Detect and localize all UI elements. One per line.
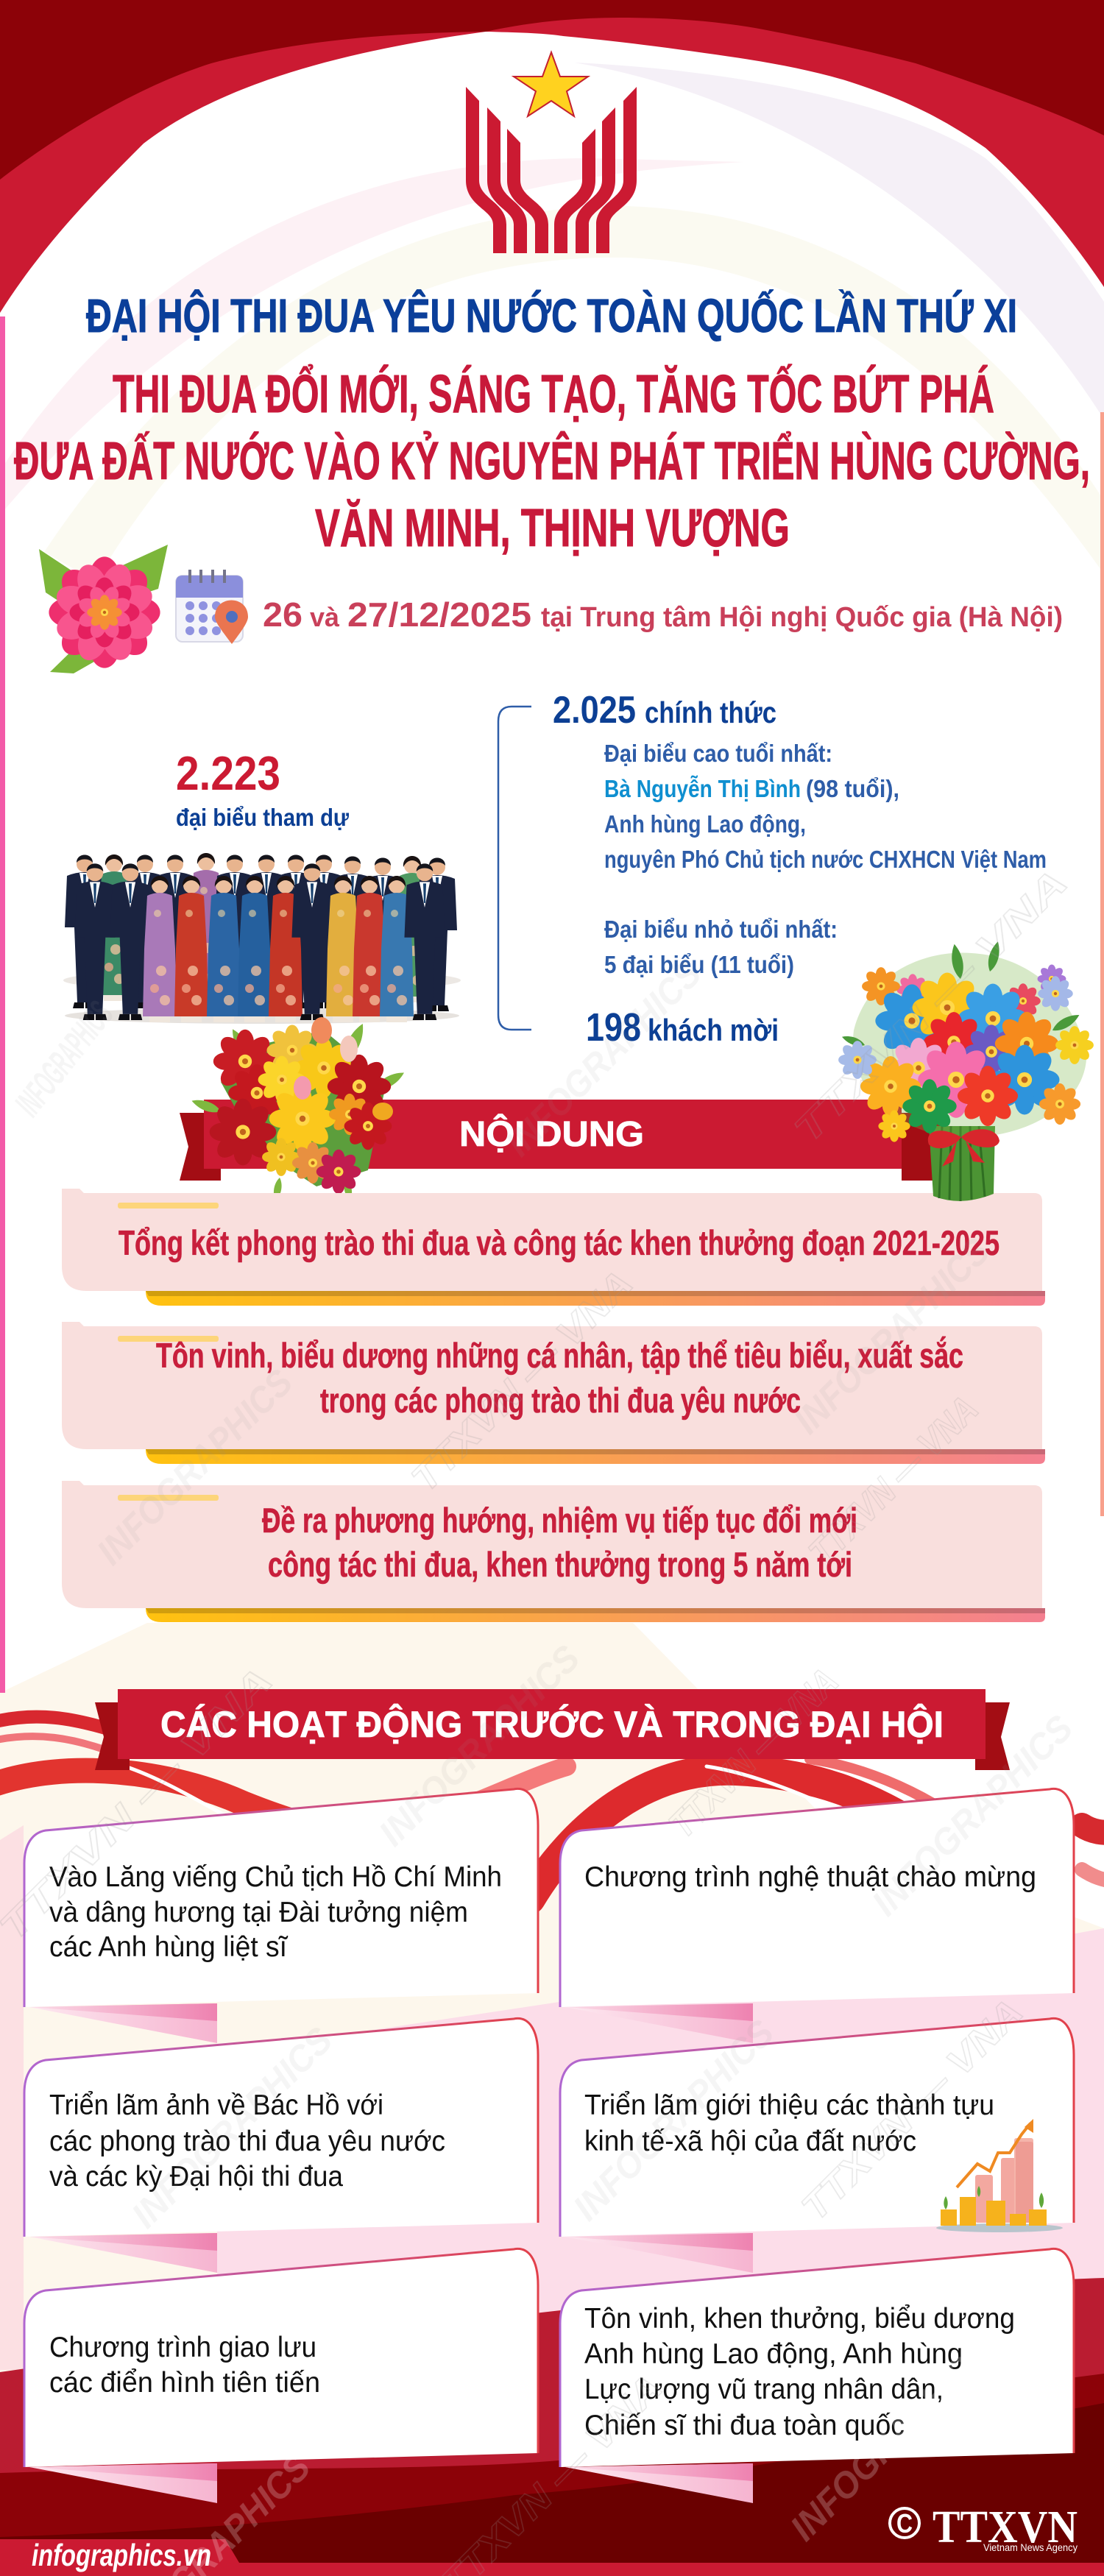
panel: content item 3: Đề ra phương hướng, nhiệm vụ tiếp tục đổi mới — [262, 1501, 857, 1540]
watermarks: INFOGRAPHICS — [89, 1362, 300, 1573]
illustration: delegates group — [63, 853, 461, 1024]
panel: activity card 6 — [559, 2248, 1075, 2503]
panel: activity card 3: và các kỳ Đại hội thi đua — [49, 2161, 343, 2193]
panel: activity card 6: Chiến sĩ thi đua toàn quốc — [584, 2410, 905, 2441]
panel: activity card 1: Vào Lăng viếng Chủ tịch Hồ Chí Minh — [49, 1861, 502, 1893]
watermarks: TTXVN — VNA — [801, 1388, 986, 1574]
panel: activity card 1 — [24, 1788, 539, 2043]
banner: activities heading: CÁC HOẠT ĐỘNG TRƯỚC VÀ TRONG ĐẠI HỘI — [160, 1703, 944, 1745]
watermarks: INFOGRAPHICS — [498, 953, 709, 1164]
text: oldest and youngest delegates: Đại biểu cao tuổi nhất: — [604, 740, 832, 767]
watermarks: INFOGRAPHICS — [124, 2020, 340, 2236]
panel: activity card 5: Chương trình giao lưu — [49, 2332, 316, 2363]
banner: activities heading — [95, 1689, 1010, 1770]
logo: TTXVN: C — [896, 2508, 913, 2538]
panel: activity card 6: Anh hùng Lao động, Anh hùng — [584, 2338, 963, 2370]
watermarks: INFOGRAPHICS — [371, 1638, 587, 1854]
logo: TTXVN: Vietnam News Agency — [983, 2541, 1078, 2553]
stat: guests: khách mời — [648, 1013, 779, 1047]
date and venue: 27/12/2025 — [347, 595, 531, 634]
text: oldest and youngest delegates: 5 đại biểu (11 tuổi) — [604, 951, 794, 978]
date and venue: 26 — [263, 595, 302, 634]
ribbons behind activities banner — [0, 1717, 1104, 1899]
panel: activity card 4: Triển lãm giới thiệu các thành tựu — [584, 2090, 994, 2121]
icon: small bouquet — [190, 1017, 406, 1202]
panel: activity card 3: Triển lãm ảnh về Bác Hồ với — [49, 2090, 383, 2121]
panel: activity card 1: và dâng hương tại Đài tưởng niệm — [49, 1897, 468, 1928]
panel: activity card 4 — [559, 2018, 1075, 2273]
watermarks: INFOGRAPHICS — [782, 2332, 999, 2549]
icon: star — [514, 52, 588, 116]
panel: activity card 3 — [24, 2018, 539, 2273]
stat: official delegates: chính thức — [645, 696, 776, 729]
stat: total delegates: 2.223 — [176, 746, 280, 800]
panel: activity card 1: các Anh hùng liệt sĩ — [49, 1931, 289, 1963]
stat: guests: 198 — [586, 1005, 641, 1050]
text: oldest and youngest delegates: Anh hùng Lao động, — [604, 810, 806, 838]
watermarks: TTXVN — VNA — [661, 1660, 846, 1846]
panel: activity card 3: các phong trào thi đua yêu nước — [49, 2126, 445, 2157]
source badge: infographics.vn — [32, 2538, 211, 2572]
title: slogan: VĂN MINH, THỊNH VƯỢNG — [315, 499, 790, 558]
icon: left stripes — [466, 87, 548, 253]
panel: activity card 6: Tôn vinh, khen thưởng, biểu dương — [584, 2303, 1015, 2335]
panel: content item 3 — [62, 1481, 1045, 1622]
watermarks: TTXVN — VNA — [786, 862, 1075, 1151]
text: oldest and youngest delegates — [604, 740, 1047, 978]
panel: content item 2 — [62, 1322, 1045, 1464]
banner: content heading — [180, 1100, 944, 1181]
stat: guests — [586, 1005, 779, 1050]
bracket — [498, 707, 531, 1030]
panel: content item 2: trong các phong trào thi đua yêu nước — [320, 1381, 801, 1420]
icon: large bouquet — [838, 941, 1094, 1201]
watermarks: TTXVN — VNA — [403, 1262, 641, 1500]
icon: growth chart with coins — [936, 2119, 1063, 2232]
text: oldest and youngest delegates: Đại biểu nhỏ tuổi nhất: — [604, 916, 838, 943]
text: oldest and youngest delegates: Bà Nguyễn Thị Bình — [604, 775, 801, 802]
watermarks: TTXVN — VNA — [793, 1991, 1031, 2229]
watermarks: INFOGRAPHICS — [864, 1708, 1080, 1924]
date and venue: tại Trung tâm Hội nghị Quốc gia (Hà Nội) — [541, 602, 1063, 633]
logo: TTXVN: TTXVN — [933, 2502, 1078, 2552]
title: slogan — [14, 364, 1090, 558]
panel: activity card 2: Chương trình nghệ thuật chào mừng — [584, 1861, 1036, 1893]
panel: activity card 5 — [24, 2248, 539, 2503]
icon: pink dahlia — [38, 545, 171, 679]
panel: content item 3: công tác thi đua, khen thưởng trong 5 năm tới — [268, 1545, 852, 1584]
watermarks — [0, 862, 1080, 2576]
watermarks: INFOGRAPHICS — [565, 2012, 782, 2229]
panel: content item 1 — [62, 1189, 1045, 1306]
banner: content heading: NỘI DUNG — [459, 1114, 644, 1154]
logo: star and stripes — [466, 52, 637, 253]
panel: activity card 6: Lực lượng vũ trang nhân dân, — [584, 2374, 944, 2405]
date and venue: và — [310, 602, 340, 632]
stat: total delegates — [176, 746, 349, 831]
watermarks: INFOGRAPHICS — [786, 1231, 997, 1442]
icon: calendar with pin — [176, 570, 248, 644]
date and venue — [263, 595, 1063, 634]
icon: right stripes — [554, 87, 637, 253]
stat: total delegates: đại biểu tham dự — [176, 804, 349, 831]
stat: official delegates: 2.025 — [553, 689, 636, 732]
text: oldest and youngest delegates: (98 tuổi), — [806, 775, 899, 802]
panel: activity card 5: các điển hình tiên tiến — [49, 2367, 320, 2399]
watermarks: INFOGRAPHICS — [7, 994, 121, 1124]
panel: activity card 4: kinh tế-xã hội của đất nước — [584, 2126, 916, 2157]
stat: official delegates — [553, 689, 776, 732]
panel: activity card 2 — [559, 1788, 1075, 2043]
